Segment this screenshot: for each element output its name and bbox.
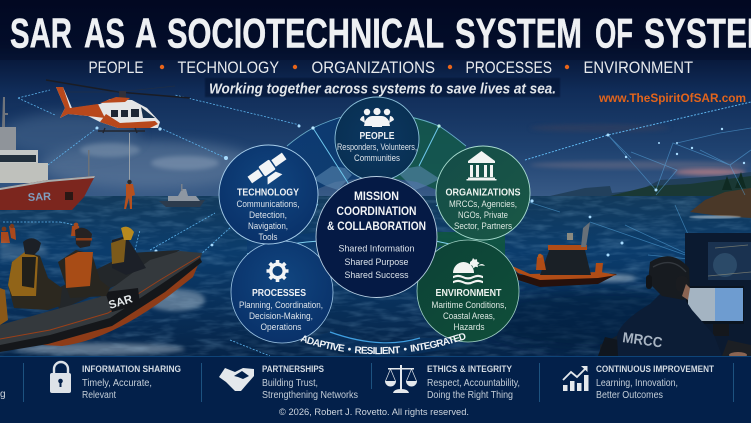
- website URL: www.TheSpiritOfSAR.com: [598, 91, 746, 105]
- orange response boat: [506, 222, 636, 287]
- principle: information sharing: INFORMATION SHARING: [82, 364, 181, 375]
- principle: partnerships: Strengthening Networks: [262, 390, 358, 401]
- panel: people: [335, 97, 419, 181]
- icon: padlock: [50, 362, 71, 393]
- subtitle: five system names: [88, 59, 693, 77]
- principle: information sharing: [50, 362, 181, 401]
- title: AS: [84, 10, 125, 56]
- panel: technology: TECHNOLOGY: [237, 186, 299, 198]
- icon: satellite: [246, 151, 292, 192]
- bottom principles band: [0, 356, 751, 423]
- network lines: [3, 90, 751, 356]
- panel: mission coordination hub: MISSION: [354, 189, 399, 203]
- principle: continuous improvement: Better Outcomes: [596, 390, 663, 401]
- principle: partnerships: Building Trust,: [262, 378, 318, 389]
- icon: waves and sun: [453, 258, 485, 284]
- panel: environment: Coastal Areas,: [443, 311, 495, 321]
- panel: technology: Tools: [258, 232, 278, 242]
- principle: information sharing: Relevant: [82, 390, 116, 401]
- top dark gradient band behind header: [0, 0, 751, 97]
- subtitle: five system names: TECHNOLOGY: [178, 59, 279, 77]
- MRCC operator and workstation: [598, 233, 751, 358]
- icon: gear: [266, 260, 288, 282]
- panel: environment: ENVIRONMENT: [436, 287, 502, 299]
- subtitle: five system names: PROCESSES: [466, 59, 552, 77]
- background: sky: [0, 0, 751, 200]
- icon: group of people: [360, 108, 394, 127]
- panel: processes: Planning, Coordination,: [239, 300, 323, 310]
- curved caption: adaptive, resilient, integrated: ADAPTIVE • RESILIENT • INTEGRATED: [300, 333, 466, 354]
- crew member 2: [58, 228, 110, 298]
- icon: rising bar chart: [563, 366, 588, 391]
- subtitle: five system names: PEOPLE: [88, 59, 144, 77]
- panel: mission coordination hub: [316, 176, 437, 298]
- RIB boat with SAR crew: SAR: [107, 293, 135, 312]
- panel: people: Communities: [354, 153, 401, 163]
- panel: processes: PROCESSES: [252, 287, 306, 299]
- principle: partnerships: [219, 364, 358, 401]
- principle: information sharing: Timely, Accurate,: [82, 378, 152, 389]
- panel: environment: [417, 240, 519, 342]
- principle: ethics and integrity: Doing the Right Thing: [427, 390, 513, 401]
- panel: environment: Hazards: [454, 322, 485, 332]
- small vessel on the horizon: [159, 184, 205, 207]
- tagline: Working together across systems to save lives at sea.: [209, 82, 556, 98]
- RIB boat with SAR crew: [0, 227, 205, 355]
- principle: continuous improvement: [563, 364, 714, 401]
- title: SOCIOTECHNICAL: [167, 10, 444, 56]
- panel: mission coordination hub: Shared Purpose: [344, 257, 408, 268]
- panel: technology: Navigation,: [248, 221, 288, 231]
- helicopter with hoisted rescuer: [46, 80, 190, 209]
- panel: people: PEOPLE: [360, 130, 394, 142]
- red SAR ship: [0, 97, 95, 210]
- title: SAR: [10, 10, 72, 56]
- copyright: © 2026, Robert J. Rovetto. All rights reserved.: [279, 407, 469, 418]
- crew member 1: [8, 238, 62, 310]
- MRCC operator and workstation: MRCC: [621, 330, 664, 352]
- title: [10, 18, 751, 48]
- panel: organizations: Sector, Partners: [454, 221, 513, 231]
- panel: environment: Maritime Conditions,: [432, 300, 506, 310]
- principle: ethics and integrity: [385, 364, 520, 401]
- panel: organizations: [436, 146, 530, 240]
- panel: technology: Communications,: [236, 199, 300, 209]
- principle: ethics and integrity: ETHICS & INTEGRITY: [427, 364, 513, 375]
- cropped text from left principle: g: [0, 389, 6, 400]
- panel: technology: Detection,: [249, 210, 287, 220]
- panel: organizations: MRCCs, Agencies,: [449, 199, 517, 209]
- icon: balance scales: [385, 365, 417, 393]
- title: OF: [595, 10, 633, 56]
- principle: ethics and integrity: Respect, Accountability,: [427, 378, 520, 389]
- panel: mission coordination hub: & COLLABORATION: [327, 219, 426, 233]
- subtitle: five system names: ORGANIZATIONS: [312, 59, 435, 77]
- background: sea: [0, 196, 751, 358]
- panel: processes: [231, 241, 333, 343]
- panel: mission coordination hub: Shared Success: [344, 270, 409, 281]
- principle: continuous improvement: CONTINUOUS IMPROVEMENT: [596, 364, 714, 375]
- rescue swimmers: [0, 223, 80, 260]
- panel: mission coordination hub: Shared Information: [338, 244, 414, 254]
- panel: technology: [219, 145, 318, 244]
- red SAR ship: SAR: [28, 191, 51, 204]
- ring segments behind circles: [247, 112, 505, 360]
- panel: processes: Decision-Making,: [249, 311, 313, 321]
- coastline: [550, 172, 751, 219]
- icon: handshake: [219, 368, 254, 391]
- panel: organizations: NGOs, Private: [458, 210, 508, 220]
- principle: continuous improvement: Learning, Innovation,: [596, 378, 678, 389]
- crew member 3: [111, 227, 146, 275]
- panel: mission coordination hub: COORDINATION: [336, 204, 416, 218]
- panel: processes: Operations: [260, 322, 302, 332]
- title: A: [135, 10, 157, 56]
- subtitle: five system names: ENVIRONMENT: [584, 59, 693, 77]
- principle: partnerships: PARTNERSHIPS: [262, 364, 324, 375]
- panel: people: Responders, Volunteers,: [337, 142, 417, 152]
- panel: organizations: ORGANIZATIONS: [446, 186, 520, 198]
- title: SYSTEM: [455, 10, 582, 56]
- icon: institution building: [466, 151, 496, 180]
